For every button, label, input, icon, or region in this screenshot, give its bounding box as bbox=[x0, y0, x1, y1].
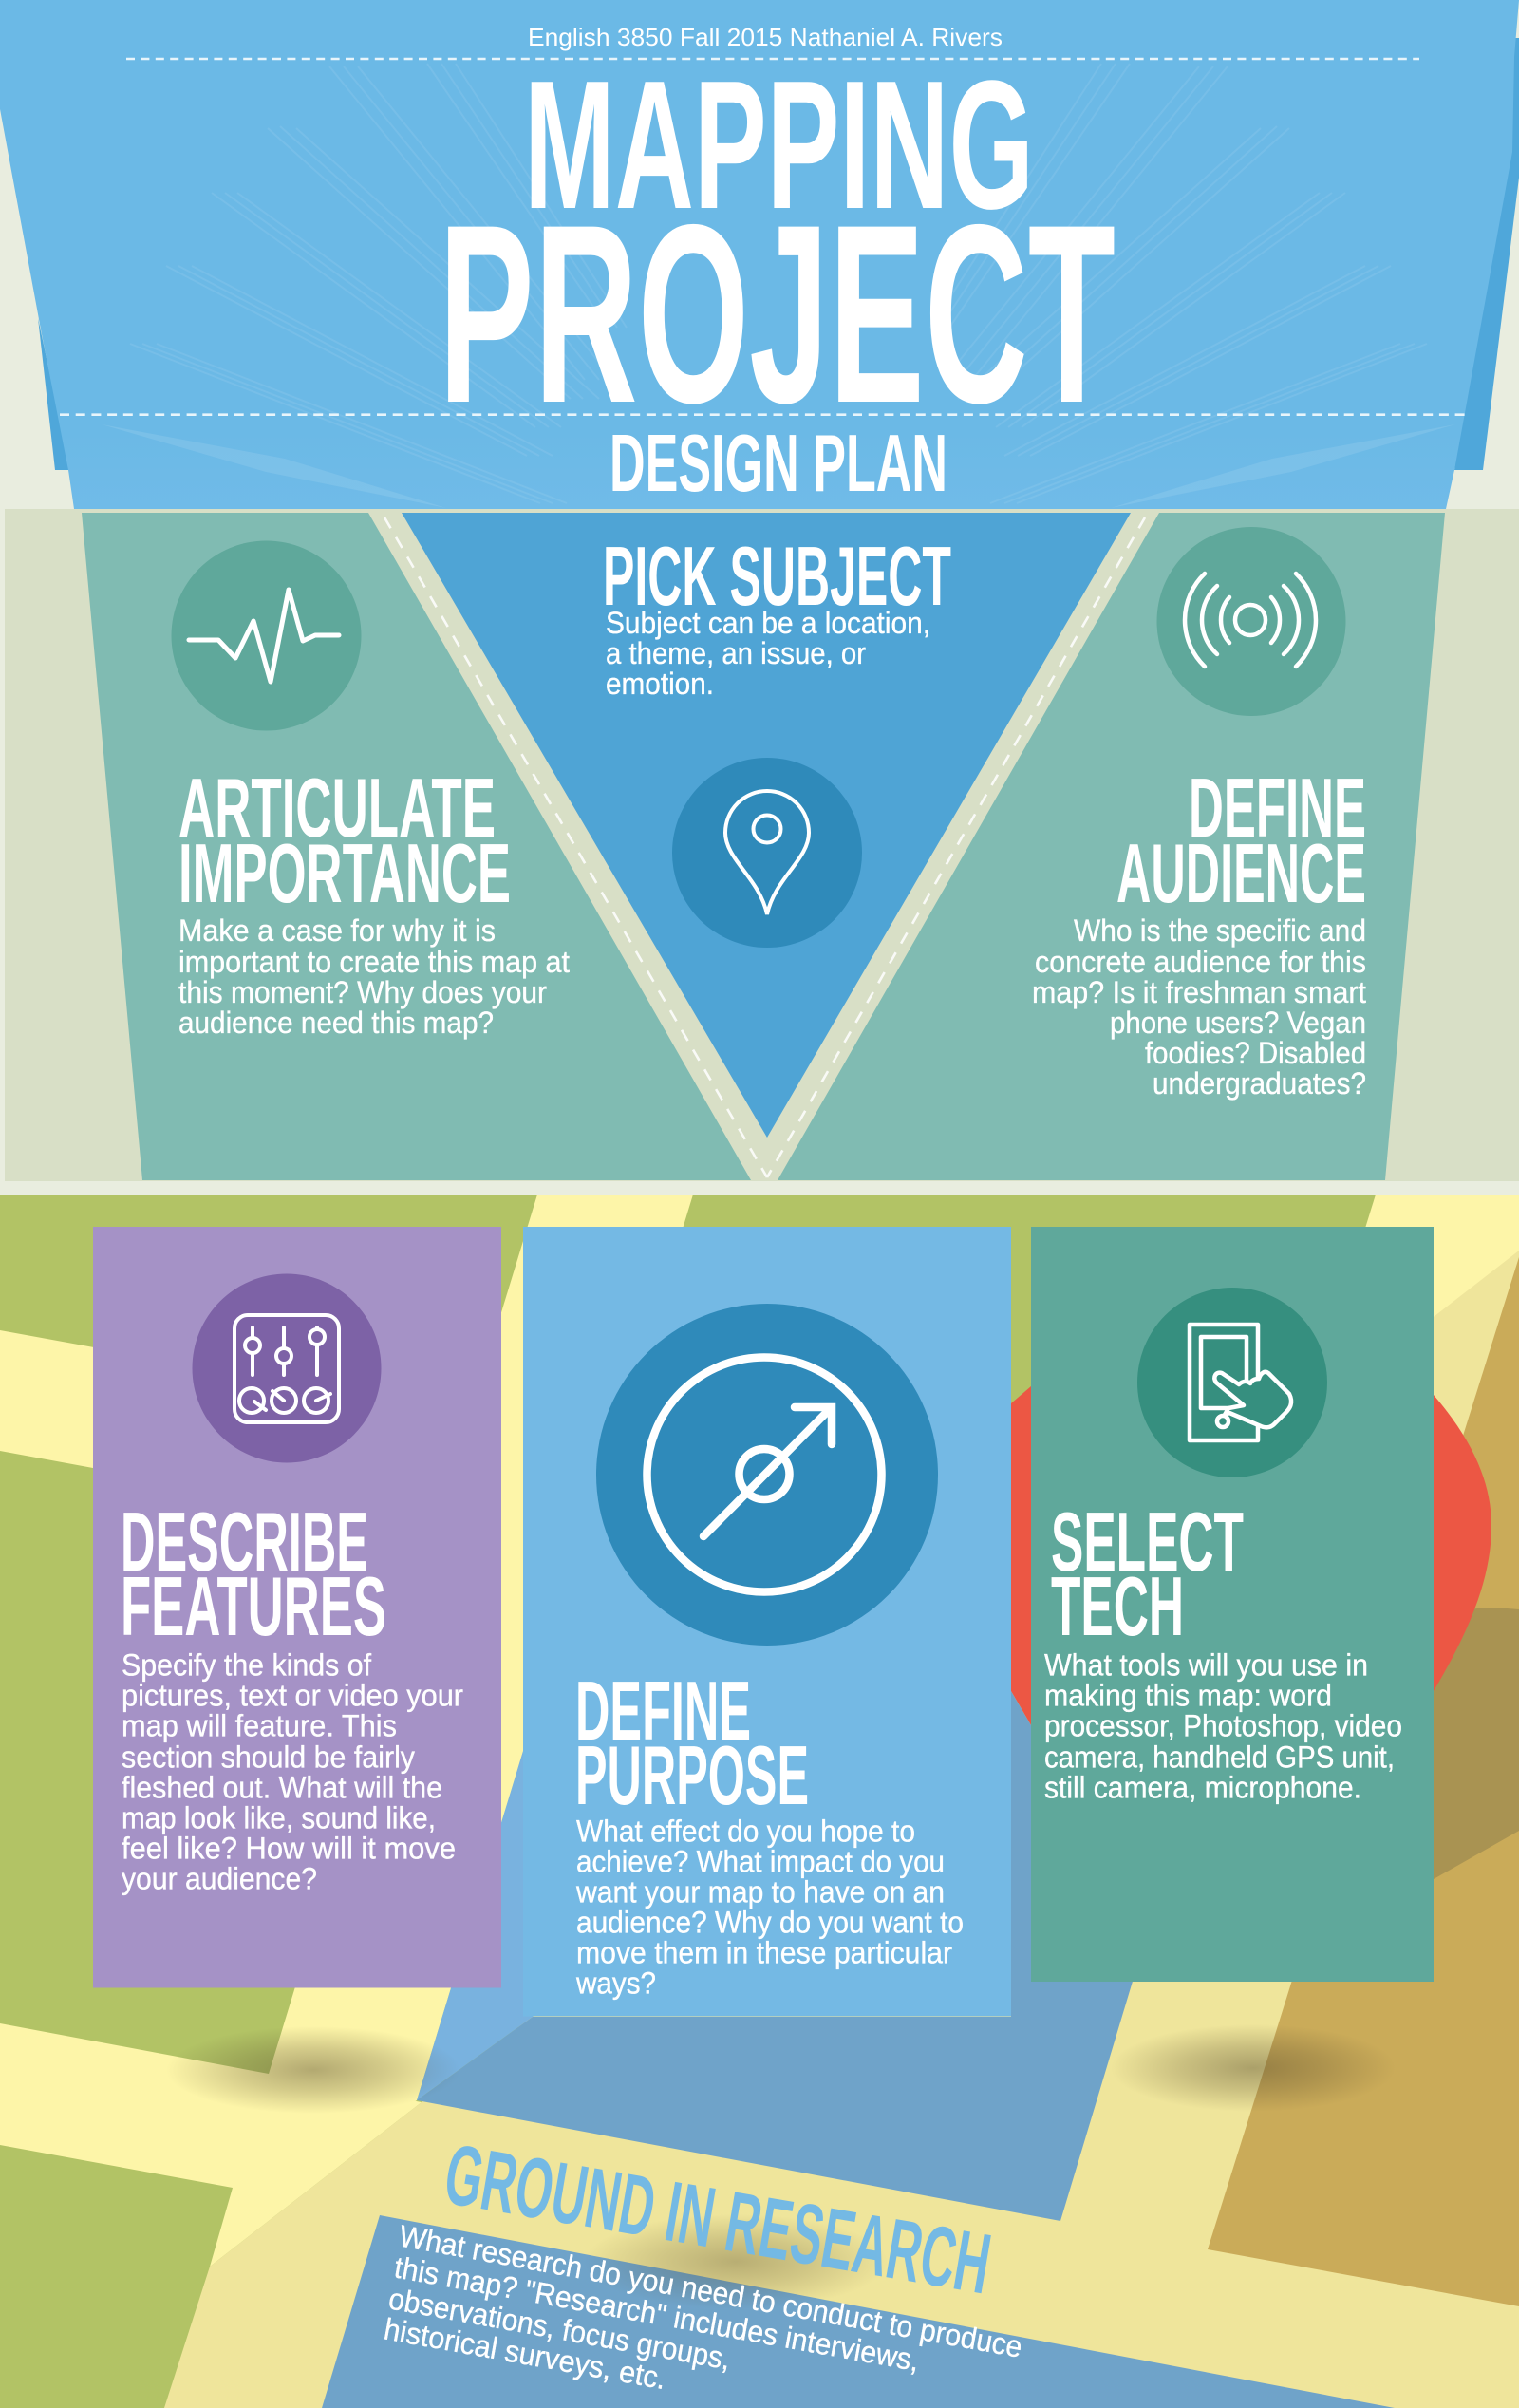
dashed seams bbox=[384, 517, 1145, 1177]
red pin bbox=[1011, 1386, 1491, 1725]
subtitle: design plan: DESIGN PLAN bbox=[609, 419, 947, 509]
road: upper left band bbox=[0, 1330, 532, 1549]
shaded ground bbox=[164, 1251, 1519, 2408]
heading: ground in research: GROUND IN RESEARCH bbox=[439, 2127, 997, 2312]
body: processor, Photoshop, video bbox=[1044, 1709, 1402, 1743]
body: camera, handheld GPS unit, bbox=[1044, 1740, 1395, 1774]
body: section should be fairly bbox=[122, 1740, 415, 1774]
text: articulate importance: Make a case for why it is bbox=[178, 913, 496, 948]
body: pictures, text or video your bbox=[122, 1679, 463, 1713]
panel: describe features bbox=[93, 1227, 501, 1988]
funnel band background bbox=[5, 509, 1519, 1181]
body bbox=[122, 1648, 463, 1895]
ground shadows bbox=[166, 2026, 460, 2114]
body: map will feature. This bbox=[122, 1709, 397, 1743]
icon: broadcast signal bbox=[1156, 527, 1346, 716]
body bbox=[575, 1814, 964, 2000]
body: want your map to have on an bbox=[575, 1874, 945, 1909]
panel: left teal bbox=[82, 513, 751, 1180]
body: audience? Why do you want to bbox=[576, 1905, 964, 1939]
panel: centre triangle bbox=[402, 513, 1131, 1138]
body: What tools will you use in bbox=[1044, 1648, 1368, 1683]
panel: define purpose bbox=[523, 1227, 1011, 2017]
header banner bbox=[0, 0, 1519, 509]
ribbon front bbox=[0, 0, 1519, 509]
body bbox=[1044, 1648, 1402, 1804]
text: pick subject bbox=[603, 529, 951, 701]
body: ways? bbox=[575, 1966, 656, 2000]
text: define audience: concrete audience for this bbox=[1035, 945, 1366, 979]
body: What effect do you hope to bbox=[576, 1814, 915, 1848]
ribbon back right bbox=[1454, 38, 1519, 470]
text: define audience: Who is the specific and bbox=[1074, 913, 1366, 948]
panel: select tech: TECH bbox=[1051, 1559, 1184, 1653]
text: define audience: DEFINE bbox=[1189, 761, 1366, 855]
body: map look like, sound like, bbox=[122, 1800, 436, 1834]
icon: sliders bbox=[192, 1274, 382, 1462]
dark blue block bbox=[417, 1691, 1206, 2221]
text: pick subject: emotion. bbox=[606, 667, 714, 701]
icon: pulse bbox=[171, 541, 361, 731]
panel: define purpose: PURPOSE bbox=[575, 1728, 809, 1822]
text: pick subject: a theme, an issue, or bbox=[606, 636, 866, 670]
text: ground in research body: this map? "Research" includes interviews, bbox=[392, 2249, 922, 2378]
panel: describe features: FEATURES bbox=[121, 1559, 386, 1653]
tan block bbox=[1208, 1257, 1519, 2306]
lower blue block bbox=[322, 2215, 1395, 2408]
text: define audience bbox=[1032, 761, 1366, 1101]
text: pick subject: Subject can be a location, bbox=[606, 606, 930, 640]
text: articulate importance: important to create this map at bbox=[178, 945, 570, 979]
road: lower left band bbox=[0, 2023, 422, 2267]
road: upper right bbox=[1187, 1195, 1519, 1804]
pin shadow on tan bbox=[1434, 1608, 1519, 1879]
credit line: English 3850 Fall 2015 Nathaniel A. Rivers bbox=[528, 23, 1003, 51]
body: Specify the kinds of bbox=[122, 1648, 371, 1683]
heading: DESCRIBE bbox=[121, 1495, 368, 1589]
text: ground in research body: historical surveys, etc. bbox=[382, 2311, 668, 2396]
text: ground in research body: What research do you need to conduct to produce bbox=[397, 2218, 1025, 2364]
text: define audience: undergraduates? bbox=[1153, 1066, 1366, 1101]
panel: right teal bbox=[778, 513, 1445, 1180]
road: diagonal bbox=[269, 1195, 693, 2184]
icon: phone and hand bbox=[1137, 1288, 1327, 1477]
ribbon back left bbox=[38, 318, 70, 470]
map background bbox=[0, 1195, 1519, 2408]
body: feel like? How will it move bbox=[122, 1831, 456, 1865]
text: articulate importance: ARTICULATE bbox=[178, 761, 496, 855]
text: define audience: map? Is it freshman smart bbox=[1032, 975, 1366, 1009]
text: ground in research body: observations, focus groups, bbox=[386, 2281, 733, 2377]
body: your audience? bbox=[122, 1861, 317, 1895]
text: articulate importance bbox=[178, 761, 570, 1040]
text: define audience: foodies? Disabled bbox=[1145, 1036, 1366, 1070]
body: move them in these particular bbox=[576, 1935, 952, 1969]
icon: map pin bbox=[672, 758, 862, 948]
text: articulate importance: IMPORTANCE bbox=[178, 826, 511, 920]
icon: compass arrow bbox=[596, 1304, 938, 1646]
text: articulate importance: this moment? Why does your bbox=[178, 975, 547, 1009]
title: mapping: MAPPING bbox=[524, 42, 1034, 247]
text: pick subject: PICK SUBJECT bbox=[603, 529, 951, 623]
body: achieve? What impact do you bbox=[576, 1844, 945, 1878]
heading: SELECT bbox=[1051, 1495, 1244, 1589]
text: articulate importance: audience need this map? bbox=[178, 1006, 494, 1040]
body: making this map: word bbox=[1044, 1679, 1332, 1713]
body: still camera, microphone. bbox=[1044, 1770, 1361, 1804]
panel: select tech bbox=[1031, 1227, 1434, 1982]
light blue block bbox=[417, 1751, 1011, 2100]
body: fleshed out. What will the bbox=[122, 1770, 442, 1804]
text: define audience: phone users? Vegan bbox=[1110, 1006, 1366, 1040]
rays bbox=[130, 64, 1427, 503]
heading: DEFINE bbox=[575, 1664, 751, 1758]
